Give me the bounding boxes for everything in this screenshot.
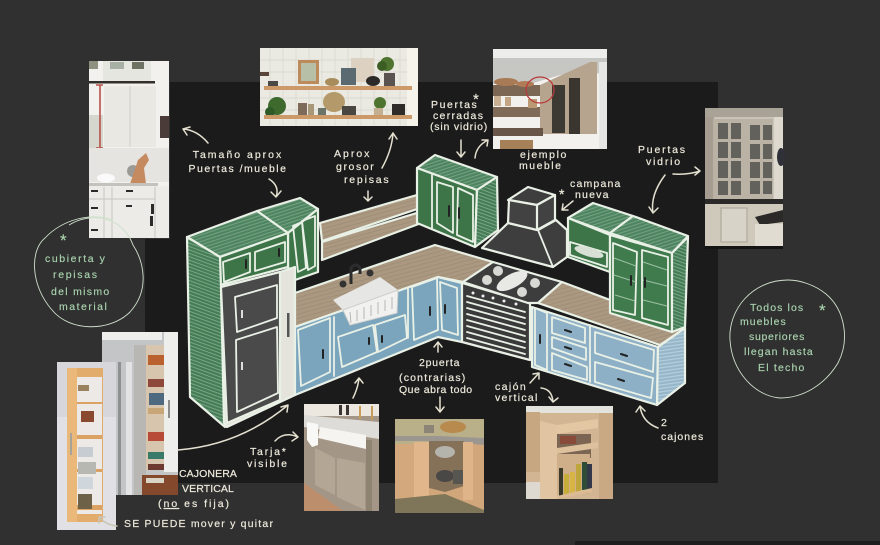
note: campana nueva: nueva [575, 189, 610, 201]
upper cabinet: left top and doors [187, 198, 318, 285]
note: aprox grosor repisas [334, 148, 390, 186]
note: ejemplo mueble [519, 149, 568, 172]
note: tarja visible: visible [247, 458, 289, 470]
callout: muebles superiores: Todos los [750, 302, 804, 314]
note: aprox grosor repisas: Aprox [334, 148, 371, 160]
photo: pull-out pantry beside fridge [102, 332, 178, 495]
arrow: to glass cabinet [649, 175, 665, 213]
note: puertas vidrio: vidrio [646, 156, 682, 168]
stove and oven [462, 262, 562, 360]
annotation: red circle [526, 77, 554, 103]
callout: muebles superiores: * [819, 301, 827, 320]
note: puertas vidrio [638, 144, 687, 168]
note: 2 puerta contrarias [399, 357, 473, 396]
refrigerator [221, 267, 295, 427]
callout: cubierta y repisas: material [59, 301, 108, 313]
note: aprox grosor repisas: grosor [336, 161, 375, 173]
arrow: to two drawers [636, 406, 658, 428]
arrow: pull-out to fridge [178, 405, 288, 450]
upper cabinet: middle [417, 155, 498, 247]
upper cabinet: right with microwave and glass doors [568, 203, 688, 332]
arrow: to sink [353, 378, 363, 398]
note: cajon vertical: vertical [495, 392, 539, 404]
arrow: to spice rack [99, 517, 117, 526]
arrow: to drawer photo [541, 388, 558, 402]
bottom dark strip [575, 541, 880, 545]
callout: cubierta y repisas [35, 217, 143, 327]
range hood [482, 187, 567, 267]
arrow: to glass photo [673, 167, 700, 175]
callout: muebles superiores: muebles [740, 316, 787, 328]
arrow: to example photo [475, 140, 488, 158]
arrow: to hood [562, 201, 573, 210]
asterisk campana: * [559, 186, 566, 202]
arrows [99, 127, 700, 526]
arrow: to vertical drawer [530, 373, 539, 383]
photo: corner cabinet with lazy Susan [395, 419, 484, 513]
note: cajon vertical: cajón [495, 381, 527, 393]
arrow: to shelves photo [382, 133, 397, 168]
note: 2 cajones: cajones [661, 431, 704, 443]
note: aprox grosor repisas: repisas [344, 174, 390, 186]
note: cajonera vertical: (no es fija) [158, 498, 231, 510]
note: 2 puerta contrarias: Que abra todo [399, 384, 473, 396]
right base cabinets [532, 307, 685, 405]
note: puertas cerradas [430, 99, 488, 133]
black board panel [145, 82, 718, 483]
farmhouse sink [333, 265, 398, 325]
note: 2 cajones [661, 417, 704, 443]
asterisk: * [473, 91, 480, 108]
left base cabinets [295, 277, 462, 395]
open shelves [320, 195, 432, 260]
callout: muebles superiores: superiores [749, 331, 805, 343]
note: puertas cerradas: cerradas [433, 110, 484, 122]
left countertop [295, 245, 493, 327]
note: tarja visible: Tarja* [250, 446, 288, 458]
callout: muebles superiores: El techo [758, 362, 806, 374]
photo: cabinet example with shelves [493, 49, 607, 149]
arrow: to sink photo [275, 432, 298, 441]
arrow: to white kitchen photo [183, 127, 208, 143]
arrow: to upper cabinet [269, 179, 281, 197]
photo: vertical pull-out drawer [526, 406, 613, 499]
note: cajonera vertical [158, 468, 237, 510]
note: se puede mover y quitar: SE PUEDE mover y quitar [124, 518, 274, 530]
arrow: to corner photo [436, 397, 444, 412]
note: cajon vertical [495, 381, 539, 404]
note: campana nueva [570, 178, 622, 201]
arrow: to shelves [364, 191, 372, 201]
tall green side panel [187, 237, 225, 427]
photo: tall pull-out spice rack [57, 362, 116, 530]
photo: white kitchen cabinets [89, 61, 169, 238]
photo: farmhouse sink cabinet [304, 404, 379, 511]
note: puertas / mueble: Puertas /mueble [189, 163, 287, 175]
callout: cubierta y repisas: cubierta y [45, 253, 107, 265]
note: campana nueva: campana [570, 178, 622, 190]
note: 2 puerta contrarias: (contrarias) [399, 372, 466, 384]
callout: cubierta y repisas: repisas [53, 269, 99, 281]
note: 2 puerta contrarias: 2puerta [419, 357, 460, 369]
photo: open wooden shelves [260, 48, 418, 126]
note: puertas cerradas: Puertas [431, 99, 478, 111]
note: tamaño aprox: Tamaño aprox [193, 149, 283, 161]
callout: cubierta y repisas: del mismo [51, 286, 111, 298]
note: 2 cajones: 2 [661, 417, 668, 429]
note: cajonera vertical: CAJONERA [179, 468, 237, 480]
note: ejemplo mueble: ejemplo [520, 149, 568, 161]
note: puertas vidrio: Puertas [638, 144, 687, 156]
callout: cubierta y repisas: * [60, 231, 68, 250]
arrow: to corner cabinet [434, 342, 442, 352]
photo: glass-door cabinet [705, 108, 785, 249]
callout: muebles superiores: llegan hasta [744, 346, 814, 358]
callout: muebles superiores [730, 280, 844, 398]
arrow: to middle cabinet [457, 140, 465, 157]
note: tarja visible [247, 446, 289, 470]
kitchen sketch [187, 155, 688, 427]
note: ejemplo mueble: mueble [519, 160, 562, 172]
note: cajonera vertical: VERTICAL [182, 483, 234, 495]
right countertop [538, 282, 685, 345]
note: puertas cerradas: (sin vidrio) [430, 121, 488, 133]
